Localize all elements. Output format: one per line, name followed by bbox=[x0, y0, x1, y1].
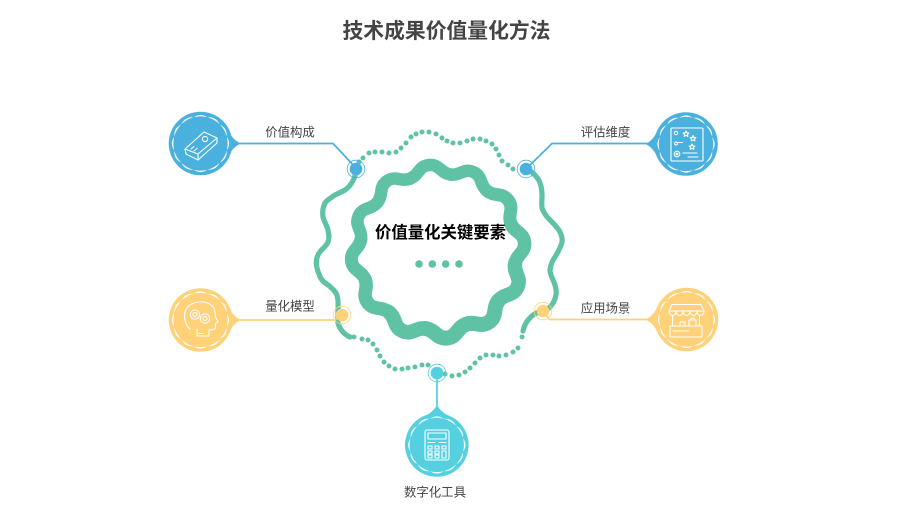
connector: 应用场景 bbox=[534, 302, 652, 320]
connector: 数字化工具 bbox=[428, 364, 446, 410]
badge: 应用场景 market stall icon bbox=[645, 288, 718, 351]
label: 应用场景: 应用场景 bbox=[581, 300, 630, 316]
center dots bbox=[415, 260, 463, 268]
connector: 价值构成 bbox=[236, 144, 365, 178]
icon: head with gears bbox=[185, 302, 218, 336]
icon: market stall bbox=[669, 304, 704, 337]
icon: calculator bbox=[425, 430, 449, 460]
center heading: 价值量化关键要素 bbox=[375, 223, 506, 242]
inner wavy ring bbox=[349, 163, 527, 340]
icon: gold bar bbox=[185, 132, 217, 160]
label: 量化模型: 量化模型 bbox=[265, 300, 315, 314]
badge: 量化模型 head icon bbox=[169, 288, 241, 352]
title: 技术成果价值量化方法 bbox=[343, 19, 550, 43]
connector: 评估维度 bbox=[517, 144, 652, 178]
connector: 量化模型 bbox=[236, 306, 351, 324]
outer wavy ring bbox=[316, 132, 562, 376]
label: 价值构成: 价值构成 bbox=[265, 124, 315, 140]
badge: 评估维度 stars icon bbox=[646, 112, 718, 176]
badge: 数字化工具 calculator icon bbox=[405, 404, 469, 477]
badge: 价值构成 gold bar icon bbox=[169, 112, 241, 175]
label: 评估维度: 评估维度 bbox=[581, 124, 630, 140]
label: 数字化工具: 数字化工具 bbox=[404, 484, 466, 500]
icon: rating sheet bbox=[671, 128, 703, 161]
